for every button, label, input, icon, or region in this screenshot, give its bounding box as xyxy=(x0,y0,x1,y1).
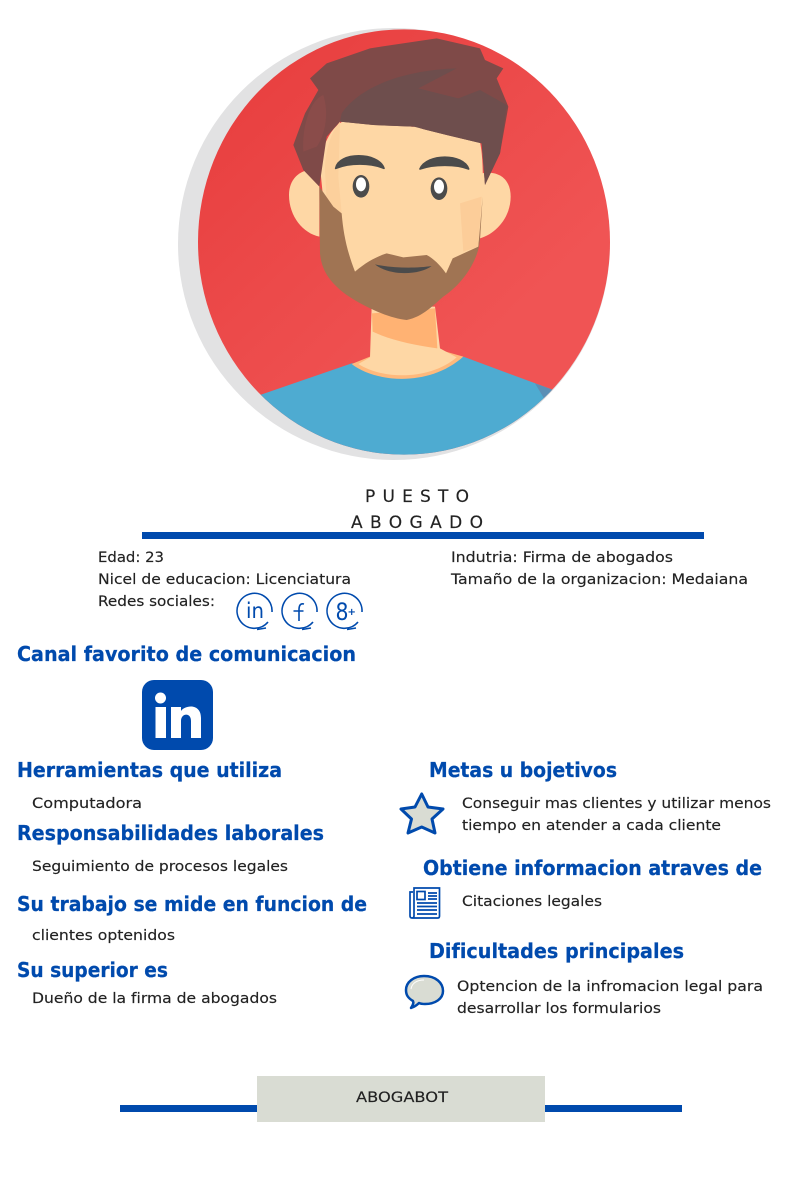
footer line left xyxy=(120,1105,260,1112)
section: dificultades: Dificultades principales xyxy=(429,939,684,963)
icon: star xyxy=(401,794,443,833)
profile details right: Indutria: Firma de abogados xyxy=(451,550,673,566)
footer label: abogabot xyxy=(257,1076,545,1122)
icon: linkedin outline: in xyxy=(246,599,264,623)
icon: newspaper xyxy=(410,888,440,918)
section: metas: tiempo en atender a cada cliente xyxy=(462,818,721,834)
icon: google plus outline: + xyxy=(348,607,356,618)
section: herramientas: Herramientas que utiliza xyxy=(17,758,282,782)
heading: canal favorito: Canal favorito de comunicacion xyxy=(17,642,356,666)
section: superior: Dueño de la firma de abogados xyxy=(32,991,277,1007)
title: abogado: ABOGADO xyxy=(351,513,483,533)
profile details right: Tamaño de la organizacion: Medaiana xyxy=(450,572,748,588)
icon: linkedin logo xyxy=(142,680,213,750)
section: superior xyxy=(17,958,277,1007)
profile details left: Edad: 23 xyxy=(98,550,164,566)
section: responsabilidades xyxy=(17,821,324,875)
icon: speech bubble xyxy=(406,976,443,1008)
icon: google plus outline xyxy=(327,593,362,630)
section: responsabilidades: Seguimiento de procesos legales xyxy=(32,859,288,875)
profile details left xyxy=(98,550,351,610)
section: dificultades: Optencion de la infromacion legal para xyxy=(457,979,763,995)
section: obtiene informacion: Obtiene informacion atraves de xyxy=(423,856,762,880)
section: obtiene informacion xyxy=(423,856,762,910)
section: dificultades: desarrollar los formularios xyxy=(457,1001,661,1017)
section: herramientas: Computadora xyxy=(32,796,142,812)
footer line right xyxy=(542,1105,682,1112)
icon: linkedin outline xyxy=(237,593,272,630)
section: trabajo: Su trabajo se mide en funcion de xyxy=(17,892,367,916)
section: trabajo xyxy=(17,892,367,944)
section: herramientas xyxy=(17,758,282,812)
profile details left: Redes sociales: xyxy=(98,594,215,610)
section: obtiene informacion: Citaciones legales xyxy=(462,894,602,910)
title: puesto: PUESTO xyxy=(365,487,469,507)
section: dificultades xyxy=(429,939,763,1017)
section: metas: Conseguir mas clientes y utilizar menos xyxy=(462,796,771,812)
icon: facebook outline xyxy=(282,593,317,630)
header divider xyxy=(142,532,704,539)
profile details right xyxy=(450,550,748,588)
section: trabajo: clientes optenidos xyxy=(32,928,175,944)
section: metas xyxy=(429,758,771,834)
section: superior: Su superior es xyxy=(17,958,168,982)
section: metas: Metas u bojetivos xyxy=(429,758,617,782)
portrait: man avatar in red circle xyxy=(178,28,610,470)
profile details left: Nicel de educacion: Licenciatura xyxy=(98,572,351,588)
icon: google plus outline: 8 xyxy=(336,598,348,626)
section: responsabilidades: Responsabilidades laborales xyxy=(17,821,324,845)
footer label: abogabot: ABOGABOT xyxy=(356,1090,448,1106)
